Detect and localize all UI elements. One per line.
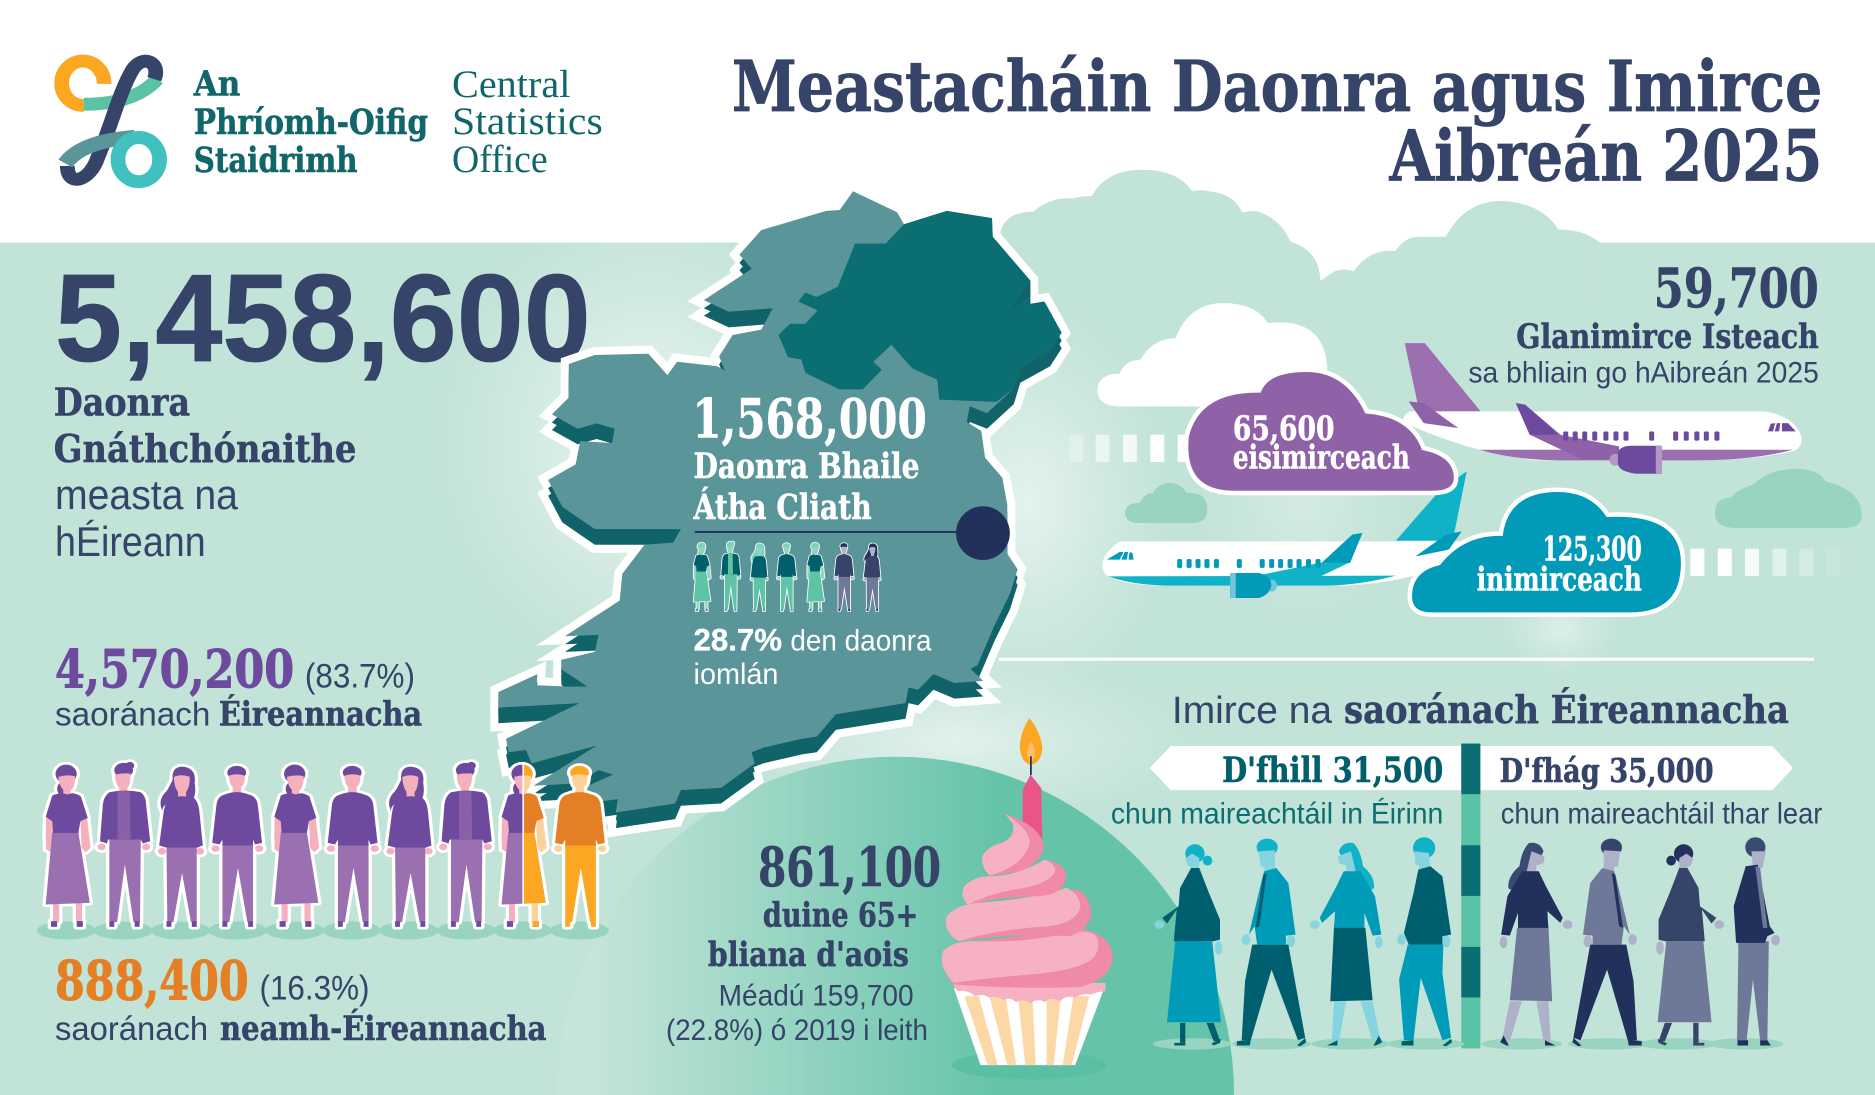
stripes right	[1690, 549, 1841, 576]
Dublin share text	[694, 622, 932, 691]
logo English name: Office	[452, 137, 548, 181]
walking people	[1153, 837, 1783, 1050]
stripes left	[1069, 435, 1192, 462]
left banner	[1480, 746, 1793, 790]
logo	[62, 61, 603, 182]
returning people	[1155, 837, 1452, 1046]
white cloud	[1097, 303, 1327, 406]
purple plane	[1403, 343, 1802, 474]
Dublin callout	[695, 506, 1010, 560]
non-Irish citizens stat: (16.3%)	[259, 969, 369, 1007]
big number: 5,458,600	[55, 249, 591, 388]
net inward migration text: sa bhliain go hAibreán 2025	[1468, 357, 1819, 390]
logo mark	[62, 61, 160, 182]
population caption: measta na	[55, 471, 239, 518]
Irish citizens migration heading: Imirce na	[1172, 689, 1333, 732]
population caption	[54, 380, 356, 565]
left banner: D'fhág 35,000	[1500, 752, 1714, 790]
logo Irish name: Staidrimh	[194, 140, 358, 181]
returned caption: chun maireachtáil in Éirinn	[1111, 798, 1443, 831]
orange figure	[554, 766, 606, 927]
title	[732, 45, 1822, 198]
population caption: Daonra	[54, 380, 190, 425]
Irish citizens migration heading: saoránach Éireannacha	[1344, 686, 1789, 733]
Northern Ireland	[778, 211, 1062, 402]
man in dark jacket	[1734, 837, 1780, 1046]
Dublin dot	[956, 506, 1010, 560]
purple figures	[46, 762, 546, 927]
teal plane	[1102, 471, 1467, 598]
Dublin share people icons	[694, 541, 881, 611]
logo English name	[452, 62, 603, 181]
Dublin share text: den daonra	[790, 624, 932, 657]
emigrants text	[1233, 409, 1410, 477]
migration graphics	[1069, 303, 1862, 615]
cupcake with candle	[942, 718, 1113, 1079]
net inward migration text	[1468, 256, 1819, 390]
older people text: 861,100	[758, 835, 941, 899]
Irish citizens migration heading	[1172, 686, 1789, 733]
logo Irish name: Phríomh-Oifig	[194, 102, 428, 143]
non-Irish citizens stat: neamh-Éireannacha	[220, 1008, 546, 1048]
small green clouds	[1125, 469, 1862, 528]
Dublin share text: iomlán	[694, 658, 778, 691]
emigrants text: eisimirceach	[1233, 439, 1410, 477]
leaving people	[1500, 837, 1780, 1046]
immigrants text: 125,300	[1543, 530, 1642, 569]
Irish citizens stat: 4,570,200	[55, 639, 294, 700]
Dublin population text: Daonra Bhaile	[694, 446, 920, 487]
teal cloud	[1410, 490, 1683, 615]
wrapper	[954, 988, 1104, 1065]
Irish citizens stat	[55, 639, 422, 734]
man in sweater	[1397, 837, 1452, 1046]
net inward migration text: 59,700	[1654, 256, 1819, 320]
older people text: bliana d'aois	[708, 935, 909, 974]
returned banner	[1150, 746, 1461, 791]
Irish citizens stat: saoránach	[55, 697, 210, 734]
ground shadows	[1153, 1038, 1783, 1050]
non-Irish citizens stat	[55, 948, 546, 1048]
half orange figure	[522, 764, 546, 927]
ground shadows	[37, 922, 609, 940]
population caption: Gnáthchónaithe	[54, 427, 356, 472]
immigrants text	[1477, 530, 1642, 599]
logo English name: Central	[452, 62, 570, 106]
Dublin population text: 1,568,000	[692, 387, 927, 451]
logo English name: Statistics	[452, 99, 603, 143]
returned banner: D'fhill 31,500	[1222, 750, 1443, 791]
immigrants text: inimirceach	[1477, 561, 1642, 599]
frosting	[952, 983, 1106, 1004]
Dublin population text: Átha Cliath	[693, 486, 872, 528]
logo Irish name: An	[193, 64, 240, 105]
Dublin population text	[692, 387, 927, 528]
older people text: duine 65+	[763, 895, 918, 934]
left caption: chun maireachtáil thar lear	[1501, 798, 1822, 831]
Irish citizens stat: Éireannacha	[219, 694, 422, 734]
net inward migration text: Glanimirce Isteach	[1516, 317, 1819, 356]
non-Irish citizens stat: saoránach	[55, 1011, 208, 1048]
Irish citizens stat: (83.7%)	[305, 657, 415, 695]
logo Irish name	[193, 64, 428, 181]
people row: ten citizens	[37, 762, 609, 940]
hill behind cupcake	[557, 757, 1234, 1095]
sky clouds	[987, 170, 1600, 299]
purple cloud	[1186, 370, 1456, 493]
older people text	[666, 835, 941, 1047]
older people text: (22.8%) ó 2019 i leith	[666, 1014, 928, 1047]
white figure outlines	[46, 762, 606, 927]
flame	[1020, 718, 1042, 765]
map of Ireland	[498, 191, 1062, 828]
non-Irish citizens stat: 888,400	[55, 948, 249, 1012]
emigrants text: 65,600	[1233, 409, 1335, 448]
centre divider bar	[1461, 744, 1480, 1048]
total population	[54, 249, 591, 565]
population caption: hÉireann	[55, 518, 206, 565]
Dublin share text: 28.7%	[694, 622, 782, 657]
candle	[1023, 775, 1042, 840]
older people text: Méadú 159,700	[719, 979, 914, 1012]
